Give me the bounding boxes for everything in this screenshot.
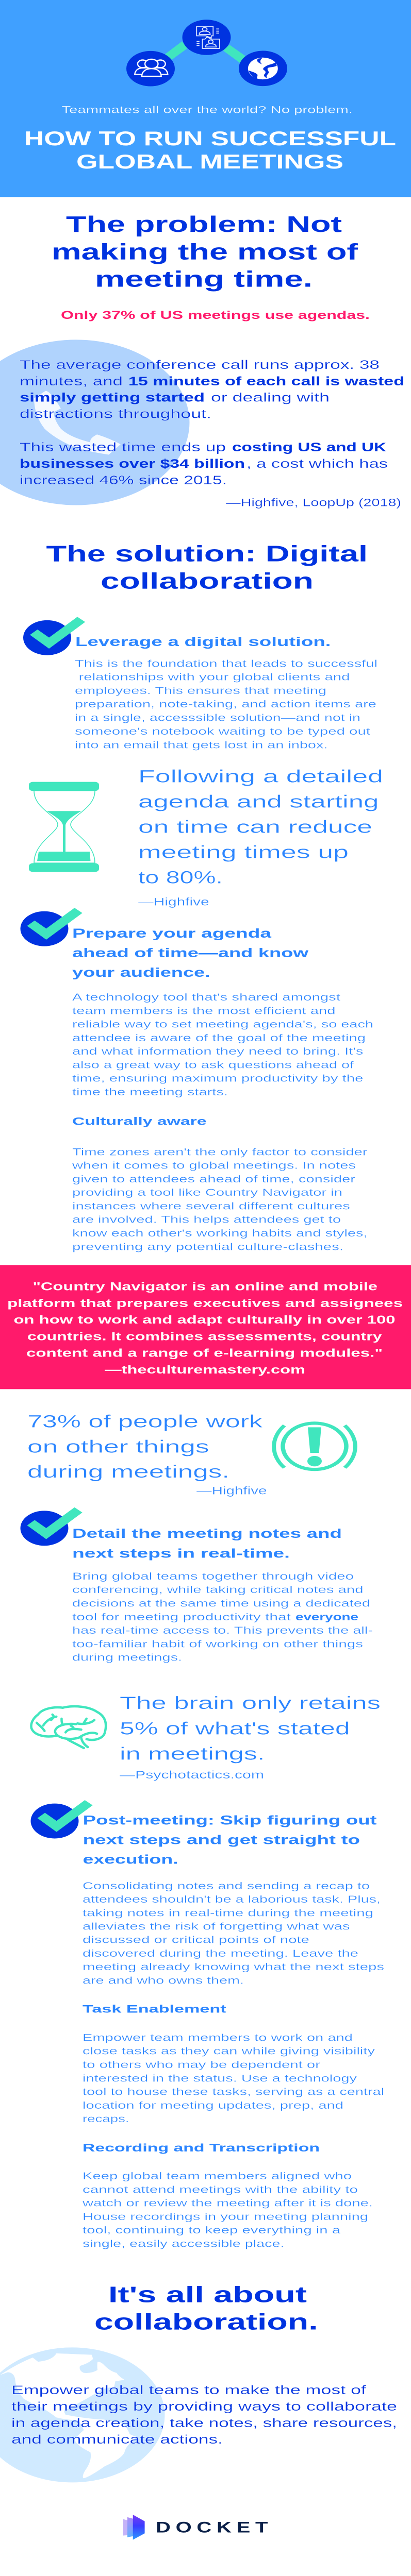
text block: leverage: relationships with your global clients and (78, 671, 350, 683)
source: Highfive: —Highfive (196, 1485, 267, 1497)
text block: detail notes: conferencing, while taking critical notes and (72, 1584, 363, 1595)
text block: recording: watch or review the meeting after it is done. (82, 2197, 373, 2209)
text block: detail notes: everyone (295, 1611, 358, 1622)
text block: task enablement: interested in the status. Use a technology (83, 2073, 357, 2083)
heading: collaboration: It's all about (108, 2282, 307, 2308)
text block: closing: Empower global teams to make the most of (11, 2383, 367, 2397)
text block: leverage: This is the foundation that leads to successful (75, 658, 377, 669)
pink stat line: Only 37% of US meetings use agendas. (61, 309, 370, 321)
heading: collaboration: collaboration. (94, 2309, 318, 2335)
heading: the problem: The problem: Not (66, 212, 342, 237)
icon: background globe (0, 2347, 165, 2483)
text block: prepare agenda: time, ensuring maximum productivity by the (72, 1073, 363, 1084)
icon: hourglass (29, 782, 99, 872)
text block: detail notes: during meetings. (72, 1652, 182, 1663)
stat: brain retains 5%: in meetings. (120, 1743, 265, 1764)
text block: post-meeting: discovered during the meeting. Leave the (83, 1947, 358, 1959)
subheading: prepare agenda (72, 926, 309, 980)
main title: GLOBAL MEETINGS (76, 150, 343, 173)
icon: check 4 (31, 1800, 93, 1838)
text block: conference call cost: , a cost which has (246, 457, 388, 471)
logo: docket (123, 2515, 268, 2540)
text block: culturally aware: Time zones aren't the only factor to consider (72, 1146, 368, 1158)
quote text: on how to work and adapt culturally in over 100 (13, 1313, 395, 1326)
stat: brain retains 5%: The brain only retains (120, 1693, 381, 1713)
subheading: post-meeting (83, 1814, 377, 1867)
subheading: leverage: Leverage a digital solution. (75, 635, 331, 649)
text block: leverage: into an email that gets lost in an inbox. (75, 739, 327, 751)
text block: detail notes: has real-time access to. This prevents the all- (72, 1625, 373, 1636)
text block: task enablement: recaps. (83, 2113, 129, 2124)
text block: prepare agenda: attendee is aware of the goal of the meeting (72, 1032, 366, 1043)
subheading: prepare agenda: your audience. (72, 965, 210, 980)
panel: phone circle background (0, 340, 190, 505)
text block: post-meeting (83, 1880, 384, 1986)
subheading: detail notes: next steps in real-time. (72, 1547, 290, 1561)
stat: agenda reduces meeting time: Following a detailed (138, 767, 383, 786)
text block: culturally aware: are involved. This helps attendees get to (72, 1214, 341, 1225)
heading: the solution: collaboration (101, 568, 314, 594)
text block: recording: cannot attend meetings with the ability to (83, 2184, 358, 2195)
heading: the problem: making the most of (52, 239, 358, 264)
text block: task enablement: Empower team members to work on and (83, 2032, 353, 2043)
icon: globe (239, 51, 287, 86)
quote text: "Country Navigator is an online and mobile (33, 1280, 377, 1293)
subheading: prepare agenda: Prepare your agenda (72, 926, 272, 941)
stat: agenda reduces meeting time: to 80%. (138, 868, 223, 887)
icon: check 1 (23, 617, 85, 655)
stat: agenda reduces meeting time (138, 767, 383, 887)
text block: detail notes (72, 1570, 373, 1663)
stat: 73% work on other things: 73% of people work (27, 1412, 263, 1431)
text block: culturally aware: providing a tool like Country Navigator in (72, 1187, 342, 1198)
text block: culturally aware (72, 1146, 368, 1252)
stat: brain retains 5% (120, 1693, 381, 1764)
icon: brain (31, 1706, 106, 1748)
source: Highfive, LoopUp: —Highfive, LoopUp (2018) (226, 497, 401, 509)
text block: prepare agenda: A technology tool that's shared amongst (72, 992, 341, 1003)
text block: recording: single, easily accessible place. (83, 2238, 285, 2249)
subheading: recording and transcription: Recording and Transcription (83, 2142, 320, 2154)
source: Highfive: —Highfive (138, 896, 209, 908)
text block: recording: Keep global team members aligned who (83, 2171, 352, 2181)
text block: closing: their meetings by providing ways to collaborate (11, 2400, 397, 2414)
text block: post-meeting: Consolidating notes and sending a recap to (83, 1880, 370, 1891)
icon: check 3 (21, 1507, 83, 1546)
text block: closing: and communicate actions. (11, 2433, 223, 2447)
stat: brain retains 5%: 5% of what's stated (120, 1719, 350, 1738)
text block: conference call cost: costing US and UK (232, 440, 386, 454)
text block: conference call cost: simply getting started (20, 391, 205, 404)
text block: conference call cost: increased 46% since 2015. (20, 473, 227, 487)
icon: docket mark (123, 2515, 145, 2540)
text block: culturally aware: when it comes to global meetings. In notes (72, 1160, 356, 1171)
heading: collaboration (94, 2282, 318, 2335)
heading: the problem (52, 212, 358, 292)
text block: task enablement (83, 2032, 384, 2124)
text block: culturally aware: preventing any potential culture-clashes. (72, 1241, 343, 1252)
text block: detail notes: too-familiar habit of working on other things (72, 1638, 363, 1650)
text block: conference call cost: 15 minutes of each call is wasted (128, 375, 404, 388)
main title (24, 127, 396, 173)
subheading: task enablement: Task Enablement (83, 2003, 226, 2015)
text block: closing (11, 2383, 397, 2447)
text block: conference call cost: The average conference call runs approx. 38 (20, 358, 380, 372)
icon: video chat (183, 20, 231, 55)
text block: post-meeting: attendees shouldn't be a laborious task. Plus, (83, 1894, 381, 1905)
header panel (0, 0, 411, 197)
text block: prepare agenda (72, 992, 373, 1097)
text block: recording: House recordings in your meeting planning (83, 2211, 368, 2222)
subheading: culturally aware: Culturally aware (72, 1115, 206, 1128)
quote text: platform that prepares executives and assignees (7, 1297, 403, 1310)
icon: team people (126, 51, 175, 86)
subheading: post-meeting: Post-meeting: Skip figuring out (83, 1814, 377, 1827)
text block: leverage: in a single, accesssible solution—and not in (75, 712, 360, 723)
main title: HOW TO RUN SUCCESSFUL (24, 127, 396, 149)
text block: post-meeting: meeting already knowing what the next steps (83, 1961, 384, 1972)
stat: 73% work on other things: on other things (27, 1436, 209, 1456)
text block: task enablement: location for meeting updates, prep, and (83, 2099, 343, 2111)
text block: prepare agenda: team members is the most efficient and (72, 1005, 336, 1016)
stat: agenda reduces meeting time: agenda and starting (138, 792, 379, 811)
subheading: post-meeting: execution. (83, 1853, 178, 1867)
quote text (7, 1280, 403, 1376)
text block: conference call cost: This wasted time ends up (20, 440, 226, 454)
text block: post-meeting: alleviates the risk of forgetting what was (83, 1921, 350, 1932)
subheading: detail notes: Detail the meeting notes and (72, 1527, 342, 1541)
text block: task enablement: close tasks as they can while giving visibility (83, 2045, 375, 2057)
heading: the solution (46, 541, 368, 594)
tagline: Teammates all over the world? No problem. (62, 105, 353, 116)
text block: prepare agenda: and what information they need to bring. It's (72, 1046, 363, 1057)
heading: the solution: The solution: Digital (46, 541, 368, 566)
icon: phone handset (34, 391, 121, 455)
text block: conference call cost: distractions throughout. (20, 408, 211, 421)
source: Psychotactics: —Psychotactics.com (120, 1769, 264, 1781)
stat: agenda reduces meeting time: meeting times up (138, 842, 349, 862)
text block: detail notes: decisions at the same time using a dedicated (72, 1598, 370, 1609)
text block: closing: in agenda creation, take notes, share resources, (11, 2416, 397, 2430)
subheading: post-meeting: next steps and get straight to (83, 1833, 360, 1847)
text block: post-meeting: discussed or critical points of note (83, 1934, 309, 1945)
text block: detail notes: Bring global teams together through video (72, 1570, 354, 1582)
text block: leverage: preparation, note-taking, and action items are (75, 699, 376, 709)
text block: leverage (75, 658, 377, 751)
text block: conference call cost: businesses over $34 billion (20, 457, 245, 471)
text block: task enablement: tool to house these tasks, serving as a central (83, 2086, 384, 2097)
text block: culturally aware: instances where several different cultures (72, 1200, 350, 1212)
text block: post-meeting: taking notes in real-time during the meeting (83, 1907, 373, 1919)
stat: agenda reduces meeting time: on time can reduce (138, 817, 372, 837)
text block: prepare agenda: also a great way to ask questions ahead of (72, 1059, 354, 1071)
text block: culturally aware: know each other's working habits and styles, (72, 1228, 368, 1239)
text block: task enablement: to others who may be dependent or (83, 2059, 321, 2070)
subheading: prepare agenda: ahead of time—and know (72, 946, 309, 960)
connector lines (165, 41, 245, 63)
text block: conference call cost: minutes, and (20, 375, 123, 388)
heading: the problem: meeting time. (95, 266, 313, 292)
text block: leverage: someone's notebook waiting to be typed out (75, 725, 371, 737)
stat: 73% work on other things: during meetings. (27, 1462, 229, 1482)
quote text: content and a range of e-learning modules." (26, 1346, 383, 1359)
text block: post-meeting: are and who owns them. (83, 1975, 244, 1986)
text block: recording (82, 2171, 373, 2249)
panel: country navigator quote (0, 1265, 411, 1389)
icon: check 2 (21, 908, 83, 946)
text block: prepare agenda: time the meeting starts. (72, 1086, 228, 1097)
stat: 73% work on other things (27, 1412, 263, 1482)
quote text: countries. It combines assessments, country (27, 1330, 382, 1343)
text block: leverage: employees. This ensures that meeting (75, 685, 326, 696)
text block: culturally aware: given to attendees ahead of time, consider (72, 1173, 356, 1184)
quote text: —theculturemastery.com (105, 1363, 305, 1376)
text block: conference call cost: or dealing with (211, 391, 330, 404)
wordmark: DOCKET (156, 2519, 268, 2536)
subheading: detail notes (72, 1527, 342, 1561)
text block: recording: tool, continuing to keep everything in a (83, 2225, 340, 2235)
icon: alert (274, 1423, 355, 1469)
text block: prepare agenda: reliable way to set meeting agenda's, so each (72, 1019, 373, 1030)
text block: conference call cost (20, 358, 404, 487)
text block: detail notes: tool for meeting productivity that (72, 1611, 291, 1622)
